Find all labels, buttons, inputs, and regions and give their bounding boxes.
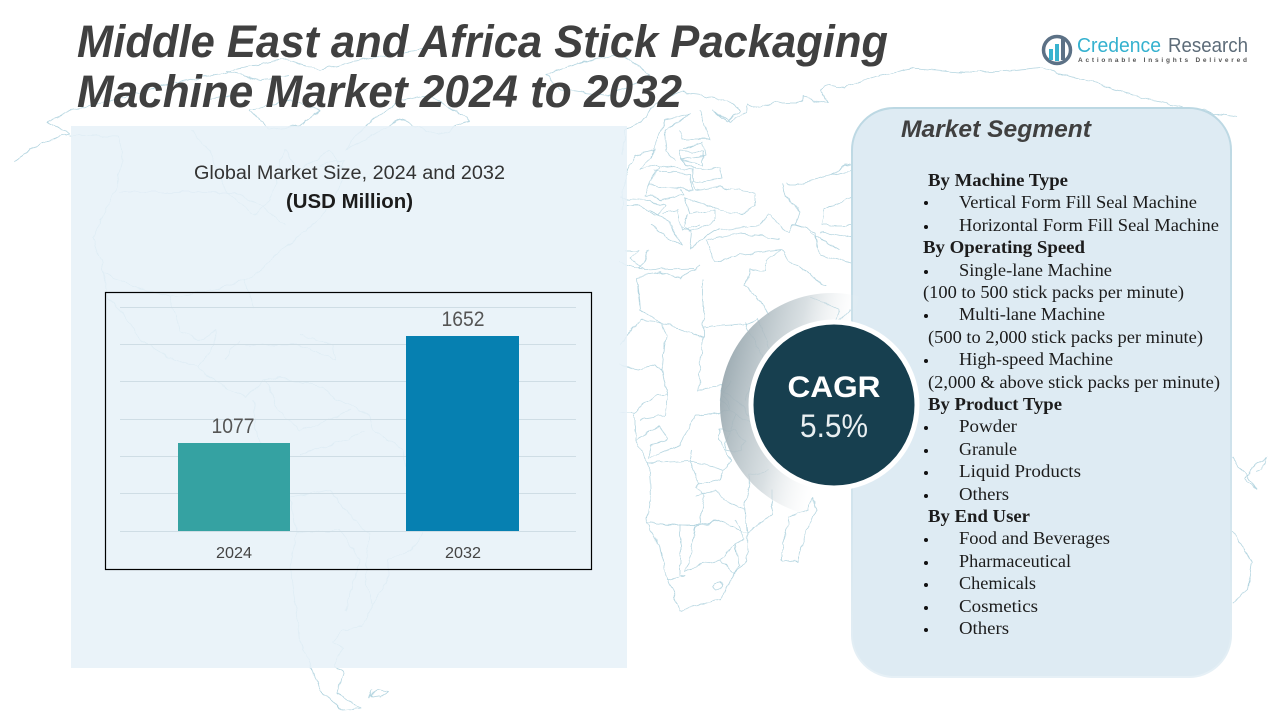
segment list: Horizontal Form Fill Seal Machine	[959, 215, 1219, 235]
bar 2024	[178, 443, 290, 531]
label 2032: 2032	[445, 545, 481, 562]
logo wordmark second word: Research	[1168, 35, 1248, 57]
bar chart	[106, 292, 592, 570]
segment list: By End User	[928, 506, 1030, 526]
title: Middle East and Africa Stick Packaging	[77, 16, 888, 67]
segment list: Others	[959, 484, 1009, 504]
title: Machine Market 2024 to 2032	[77, 66, 682, 117]
label 2024: 2024	[216, 545, 252, 562]
CAGR badge	[720, 293, 944, 517]
panel: market segment	[852, 108, 1231, 677]
CAGR label: CAGR	[788, 371, 881, 404]
logo: Credence Research	[1044, 35, 1248, 64]
title	[77, 16, 888, 117]
segment list: Granule	[959, 439, 1017, 459]
segment list: Others	[959, 618, 1009, 638]
segment list: (500 to 2,000 stick packs per minute)	[928, 327, 1203, 347]
segment list: Multi-lane Machine	[959, 304, 1105, 324]
segment list: Liquid Products	[959, 461, 1081, 481]
segment list: Powder	[959, 416, 1017, 436]
segment list	[923, 170, 1220, 638]
segment list: Chemicals	[959, 573, 1036, 593]
segment list: By Machine Type	[928, 170, 1068, 190]
gradient crescent	[720, 293, 944, 517]
segment list: By Product Type	[928, 394, 1062, 414]
segment list: Single-lane Machine	[959, 260, 1112, 280]
badge circle	[751, 322, 917, 488]
segment heading: Market Segment	[901, 116, 1092, 143]
segment list: Vertical Form Fill Seal Machine	[959, 192, 1197, 212]
logo tagline: Actionable Insights Delivered	[1078, 57, 1247, 64]
logo wordmark: Credence	[1077, 35, 1161, 57]
chart heading: Global Market Size, 2024 and 2032	[194, 163, 505, 184]
segment list: High-speed Machine	[959, 349, 1113, 369]
segment list: (100 to 500 stick packs per minute)	[923, 282, 1184, 302]
segment list: Food and Beverages	[959, 528, 1110, 548]
segment list: Pharmaceutical	[959, 551, 1071, 571]
value 1652: 1652	[442, 308, 484, 331]
value 1077: 1077	[212, 415, 254, 438]
icon: logo magnifier with bars	[1044, 36, 1070, 64]
segment list: By Operating Speed	[923, 237, 1085, 257]
segment list: (2,000 & above stick packs per minute)	[928, 372, 1220, 392]
segment list: Cosmetics	[959, 596, 1038, 616]
bar 2032	[406, 336, 519, 531]
chart unit: (USD Million)	[286, 191, 413, 213]
CAGR value: 5.5%	[800, 408, 868, 444]
panel: market size	[71, 126, 627, 668]
